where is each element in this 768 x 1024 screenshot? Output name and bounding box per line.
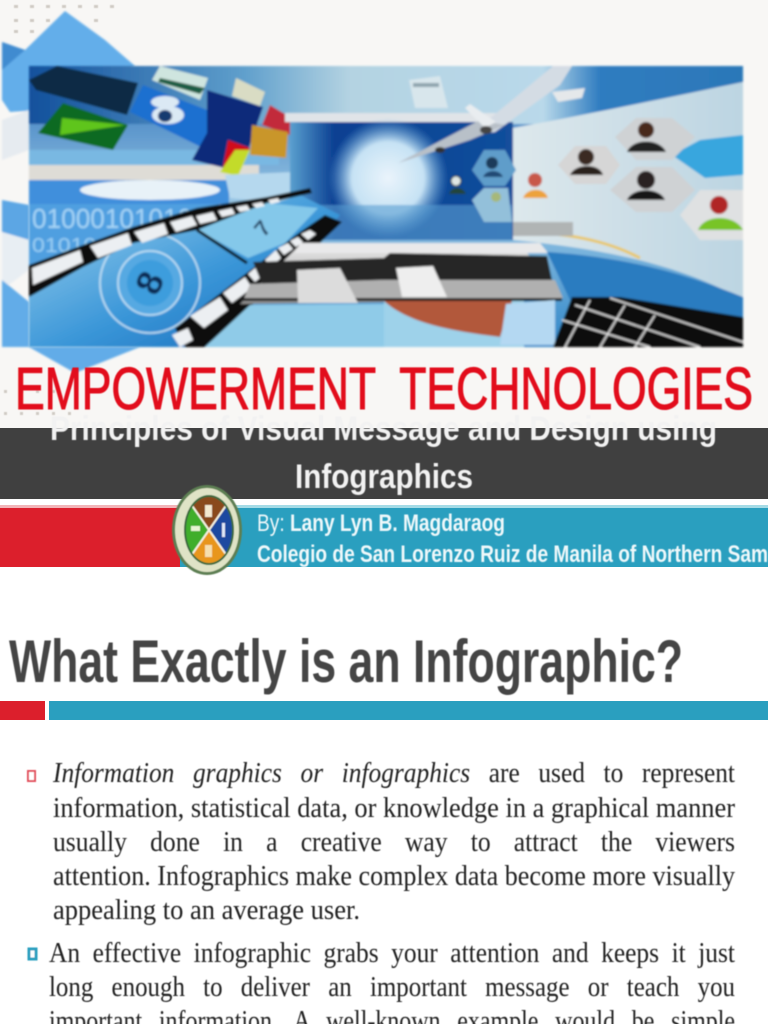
lower frame backdrop <box>205 304 384 347</box>
slide background <box>0 0 768 428</box>
filmstrip with frames: 7 <box>249 216 276 241</box>
calculator in top strip <box>409 76 448 108</box>
decorative blue shapes at left <box>2 11 140 373</box>
dark subtitle band <box>0 428 768 499</box>
author and school text: By: Lany Lyn B. Magdaraog <box>257 510 505 537</box>
subtitle text <box>50 410 717 496</box>
pale band beneath photo cards <box>224 171 292 202</box>
hero collage image <box>29 66 743 347</box>
top strip <box>29 66 743 124</box>
binary data rows: 0101010 <box>32 235 122 257</box>
author and school text <box>257 510 768 568</box>
heading rule <box>0 701 768 720</box>
binary data rows <box>29 150 279 266</box>
photo cards <box>29 66 295 176</box>
school seal logo <box>172 485 242 575</box>
airplane <box>398 66 585 163</box>
filmstrip with frames: 8 <box>127 265 172 301</box>
subtitle text: Infographics <box>295 458 473 496</box>
bullet: blue square <box>29 949 36 959</box>
paragraph 1: appealing to an average user. <box>53 894 360 926</box>
filmstrip with frames <box>29 188 342 347</box>
laptop base and keyboard <box>240 243 563 304</box>
avatars in hexagons <box>449 118 743 240</box>
bullet: red square <box>28 771 35 781</box>
paragraph 1 <box>28 757 735 926</box>
laptop screen with globe <box>285 113 513 240</box>
paragraph 1: Information graphics or infographics are used to represent <box>52 757 735 789</box>
hand holding laptop <box>384 300 555 347</box>
binary data rows: 01000101010111 <box>32 203 232 234</box>
decorative dot pattern <box>4 5 114 415</box>
paragraph 2 <box>29 937 735 1024</box>
author band <box>0 499 768 567</box>
right people panel <box>513 82 743 347</box>
hero backdrop <box>28 122 720 349</box>
